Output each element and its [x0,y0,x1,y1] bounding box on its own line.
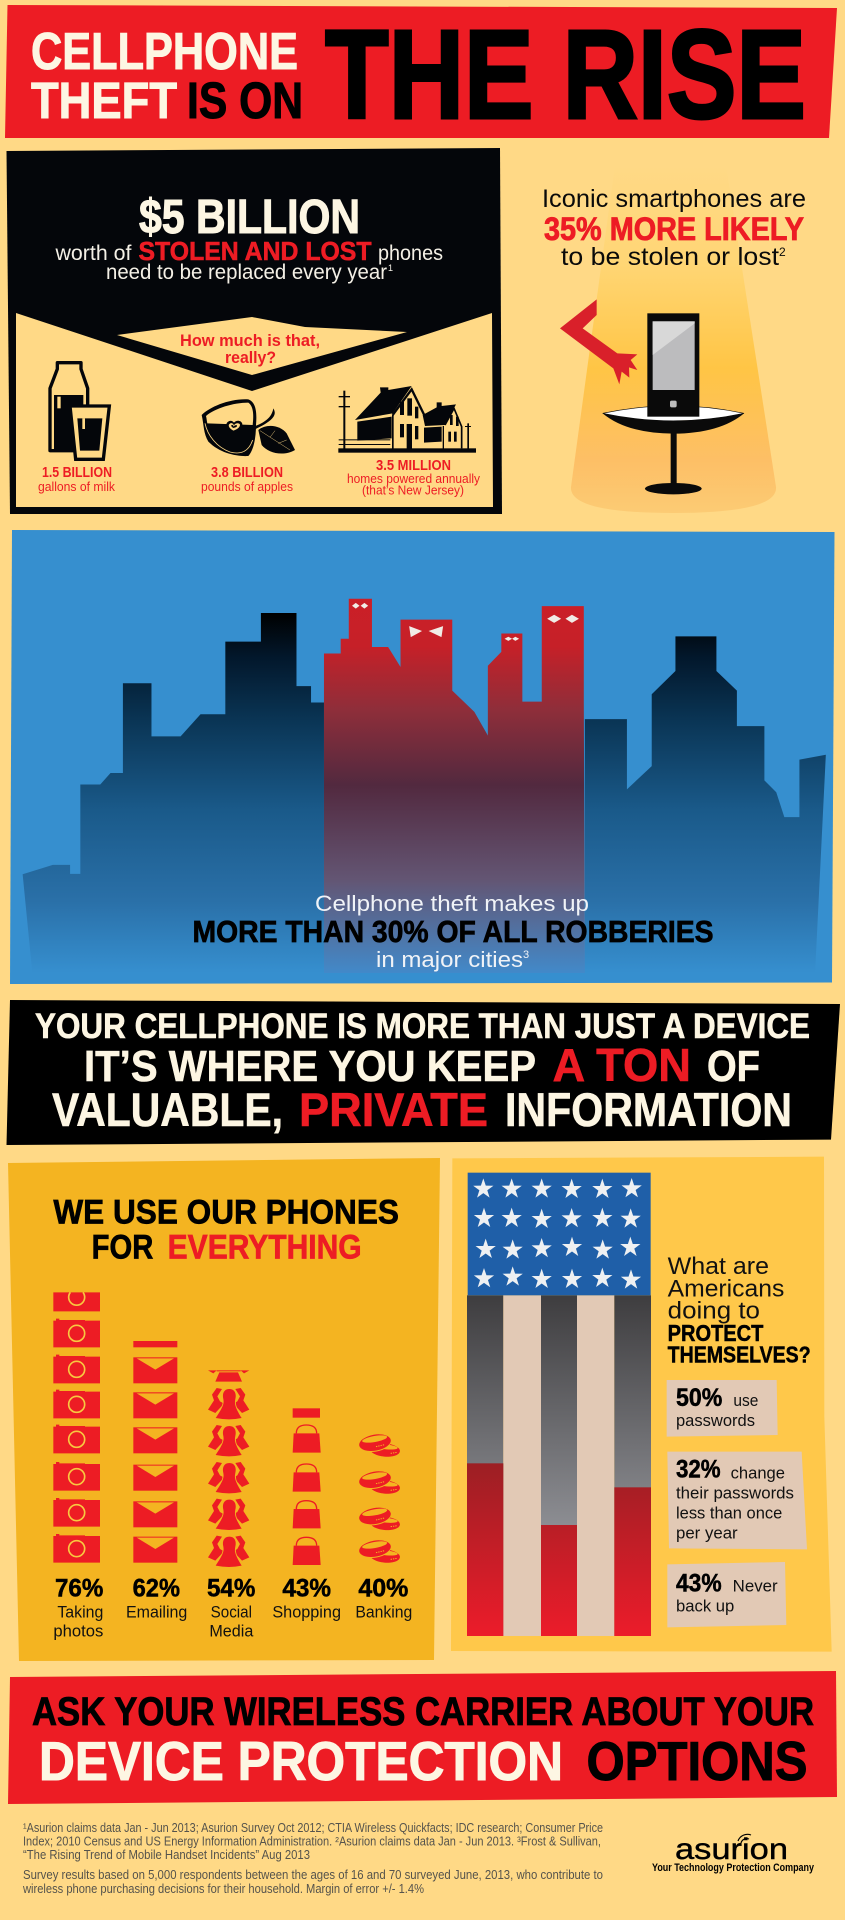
heading [53,1193,399,1266]
panel: protect themselves [451,1157,832,1652]
icon: thief arm [560,299,637,384]
label: homes: 3.5 MILLION [376,458,451,474]
stat box: passwords [667,1380,778,1437]
panel: iconic smartphones [542,165,806,513]
label: 76 percent: photos [53,1622,103,1641]
heading: PROTECT [668,1320,763,1346]
label: apples [201,465,293,494]
label: 40 percent: 40% [358,1575,408,1603]
icon: houses [338,386,476,453]
stolen and lost text: 1 [388,263,393,273]
line: valuable private: INFORMATION [505,1083,792,1136]
iconic text: 2 [779,245,786,259]
stat box: back up: 43% [676,1570,722,1598]
title: theft: THEFT [31,72,177,129]
robberies text: in major cities [376,947,523,972]
stat box: back up [667,1562,786,1627]
line: device protection options: DEVICE PROTECTION [39,1730,563,1792]
robberies text [192,891,714,972]
line: device protection options: OPTIONS [586,1730,808,1792]
panel: phone uses [8,1158,440,1661]
line: a ton: A TON [552,1039,691,1091]
stat box: passwords: 50% [676,1384,722,1412]
bar: social media [208,1370,249,1567]
iconic text: Iconic smartphones are [542,185,806,213]
robberies text: Cellphone theft makes up [315,891,589,916]
label: 43 percent [272,1575,341,1622]
heading: FOR [92,1228,153,1266]
heading: EVERYTHING [168,1228,362,1266]
iconic text: to be stolen or lost [561,243,779,271]
label: 62 percent: Emailing [126,1603,187,1622]
heading [668,1253,811,1368]
banner: private information [6,1000,840,1145]
iconic text: 35% MORE LIKELY [544,211,804,247]
label: homes: (that’s New Jersey) [362,482,464,498]
logo: asurion: Your Technology Protection Company [652,1862,815,1874]
bar: emailing [133,1341,177,1563]
label: 76 percent: Taking [57,1603,103,1622]
label: 62 percent: 62% [133,1575,180,1603]
chart: dark skyline [23,613,826,973]
question: How much is that, [180,331,320,350]
spotlight [571,165,776,513]
icon: eyes [352,603,579,641]
footnotes: wireless phone purchasing decisions for their household. Margin of error +/- 1.4% [22,1882,424,1896]
title banner [5,4,837,145]
label: 43 percent: Shopping [272,1603,341,1622]
stat box: passwords: use [733,1391,758,1410]
label: 43 percent: 43% [282,1575,331,1603]
heading: What are [668,1253,769,1280]
label: 54 percent [207,1575,255,1641]
line: a ton: IT’S WHERE YOU KEEP [84,1042,536,1091]
banner: device protection [8,1671,837,1804]
line: valuable private: VALUABLE, [52,1083,283,1136]
stat box: back up: back up [676,1597,734,1616]
label: milk: 1.5 BILLION [42,465,112,481]
title: cellphone: CELLPHONE [31,23,298,81]
stolen and lost text: STOLEN AND LOST [138,236,372,266]
label: apples: 3.8 BILLION [211,465,283,481]
line: a ton: OF [707,1042,760,1091]
icon: phone [647,313,699,417]
label: 76 percent [53,1575,103,1641]
label: homes: homes powered annually [347,471,480,486]
heading: WE USE OUR PHONES [53,1193,399,1231]
question [180,331,320,367]
flag chart [467,1173,651,1636]
label: 54 percent: Social [211,1603,252,1622]
robberies text: 3 [523,949,529,961]
label: 40 percent: Banking [355,1603,412,1622]
label: milk: gallons of milk [38,479,115,494]
stat box: change passwords: less than once [676,1503,782,1522]
panel: five billion [6,148,502,514]
footnotes: ¹Asurion claims data Jan - Jun 2013; Asurion Survey Oct 2012; CTIA Wireless Quickfacts; IDC research; Consumer Price [23,1821,603,1835]
stat box: change passwords: per year [676,1523,738,1542]
stat box: passwords: passwords [676,1411,755,1430]
title: is on: IS ON [187,72,303,129]
footnotes: Index; 2010 Census and US Energy Information Administration. ²Asurion claims data Jan - Jun 2013. ³Frost & Sullivan, [23,1834,601,1848]
chart: red skyline [324,599,585,973]
icon: milk [50,363,109,459]
stolen and lost text: worth of [54,242,132,265]
five billion figure: $5 BILLION [139,191,360,244]
bar: shopping [293,1408,321,1565]
stat box: back up: Never [733,1577,778,1596]
label: homes [347,458,480,498]
label: 76 percent: 76% [55,1575,103,1603]
label: 62 percent [126,1575,187,1622]
footnotes: Survey results based on 5,000 respondents between the ages of 16 and 70 surveyed June, 2013, who contribute to [23,1868,603,1882]
stat box: change passwords: their passwords [676,1483,794,1502]
stolen and lost text: need to be replaced every year [106,261,387,284]
question: really? [225,348,276,367]
icon: pedestal [603,406,744,494]
logo: asurion: asurion [675,1833,788,1866]
footnotes [22,1821,603,1896]
stolen and lost text: phones [378,242,443,265]
stat box: change passwords: change [731,1463,785,1482]
line: valuable private: PRIVATE [299,1083,488,1136]
heading: THEMSELVES? [668,1342,811,1368]
stat box: change passwords: 32% [676,1456,721,1484]
robberies text: MORE THAN 30% OF ALL ROBBERIES [192,914,714,949]
line: a ton [84,1039,760,1091]
label: apples: pounds of apples [201,479,293,494]
bar: banking [357,1431,401,1564]
label: 54 percent: 54% [207,1575,255,1603]
bar: taking photos [53,1292,100,1563]
label: milk [38,465,115,494]
stat box: change passwords [667,1452,807,1549]
logo: asurion [652,1833,815,1874]
footnotes: “The Rising Trend of Mobile Handset Incidents” Aug 2013 [23,1848,310,1862]
stolen and lost text [54,236,443,284]
heading: Americans [668,1276,784,1303]
line: valuable private [52,1083,792,1136]
iconic text [542,185,806,271]
panel: city skyline [10,530,834,984]
label: 40 percent [355,1575,412,1622]
label: 54 percent: Media [209,1622,254,1641]
heading: doing to [668,1297,760,1324]
icon: apple [202,399,295,456]
